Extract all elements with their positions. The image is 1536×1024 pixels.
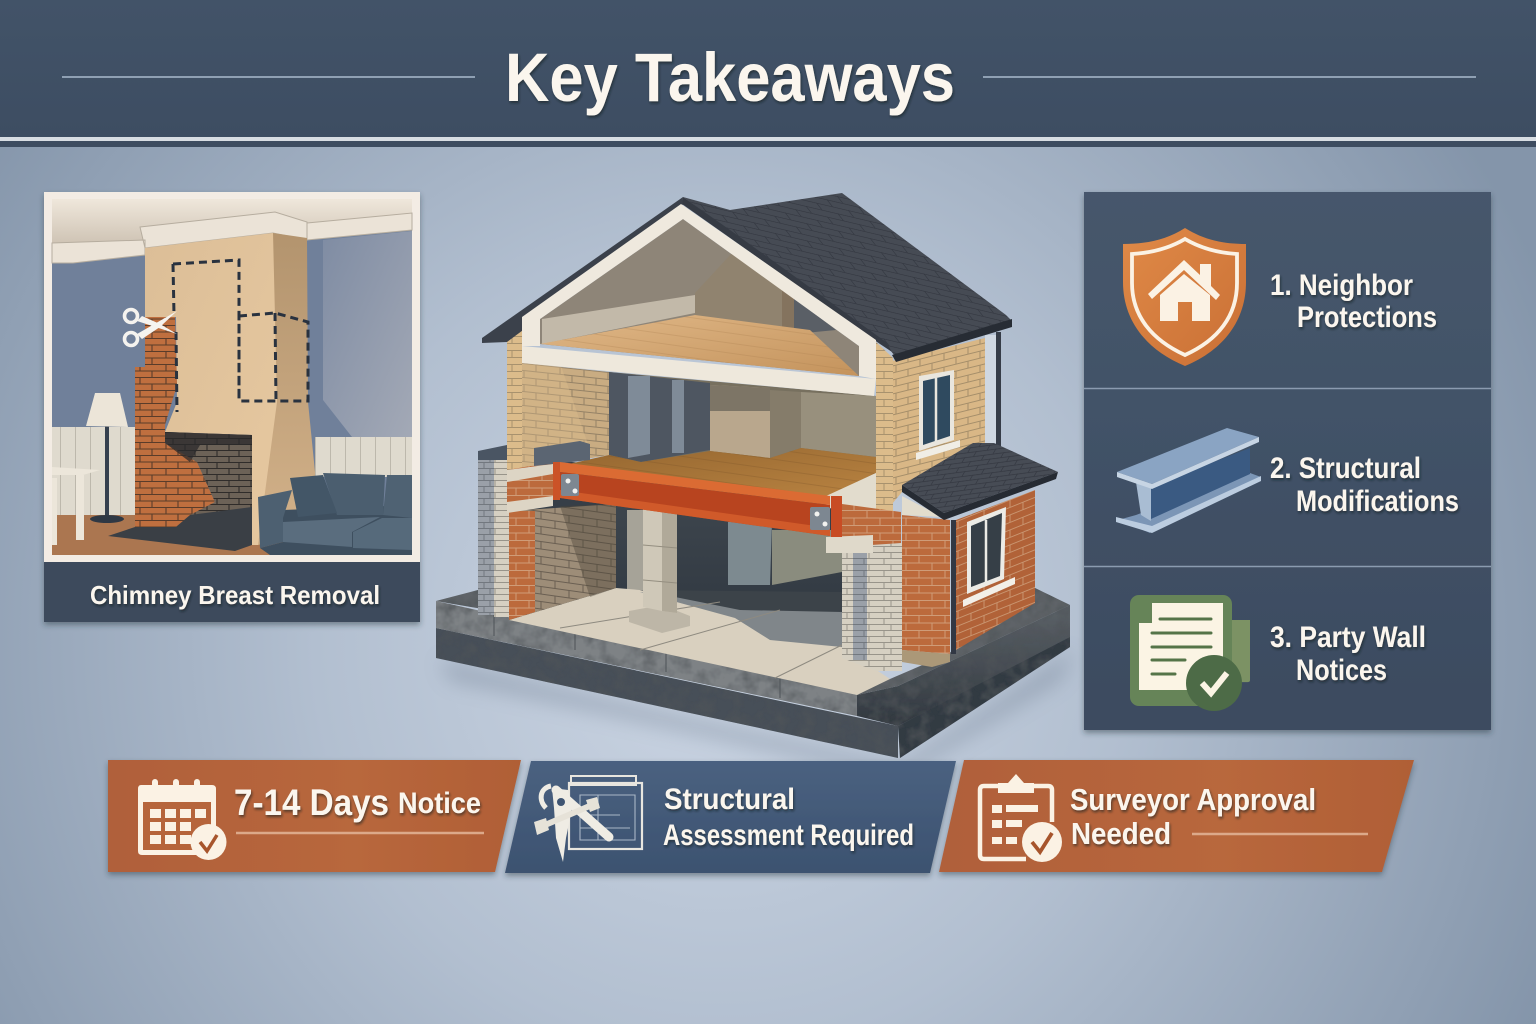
caption bar [44, 562, 420, 622]
text: party wall notices: 3. Party Wall [1270, 621, 1426, 654]
upper floor [560, 448, 876, 498]
right pier [842, 543, 902, 671]
main roof [682, 193, 1012, 362]
sofa [258, 473, 412, 555]
wainscot left [52, 427, 135, 515]
crown moulding [52, 212, 412, 263]
dashed removal outlines [173, 260, 308, 412]
hearth [108, 507, 252, 551]
text: structural modifications: Modifications [1296, 485, 1459, 518]
right upper side wall [892, 338, 985, 504]
downpipe [985, 332, 1001, 448]
caption: Chimney Breast Removal [90, 580, 380, 610]
text: neighbor protections [1270, 269, 1437, 334]
ledge [826, 473, 876, 511]
icon: notice document [1130, 595, 1250, 711]
text: 7-14 days notice: Notice [398, 787, 481, 820]
house illustration [436, 193, 1074, 778]
lower floor [509, 588, 890, 695]
bolted bracket right [810, 507, 830, 530]
side table [52, 467, 100, 545]
text: surveyor approval needed: Surveyor Approval [1070, 782, 1316, 817]
wainscot right [315, 437, 412, 477]
text: surveyor approval needed [1070, 782, 1316, 851]
text: 7-14 days notice: 7-14 Days [234, 782, 389, 823]
upper interior [609, 372, 876, 462]
text: structural assessment required: Assessment Required [663, 819, 914, 852]
left wing wall [478, 445, 509, 617]
panel: chimney breast removal [44, 192, 420, 622]
house backing [509, 455, 842, 650]
bolted bracket left [561, 474, 579, 496]
icon: clipboard [980, 774, 1062, 862]
text: party wall notices: Notices [1296, 654, 1387, 687]
header band [0, 0, 1536, 147]
title: Key Takeaways [505, 39, 955, 116]
brick band right [842, 504, 901, 547]
chimney side face [258, 233, 315, 545]
floor lamp [86, 393, 128, 523]
concrete slab [436, 588, 1070, 758]
attic interior [540, 219, 859, 376]
left brick corner column [507, 323, 522, 470]
text: neighbor protections: Protections [1297, 301, 1437, 334]
steel beam [553, 462, 842, 537]
text: structural modifications [1270, 452, 1459, 518]
extension downpipe [951, 520, 956, 654]
banner: notice period [108, 760, 521, 872]
column [629, 509, 690, 633]
text: 7-14 days notice [234, 782, 481, 823]
icon: calendar [138, 782, 226, 860]
ground shadow [440, 650, 1074, 778]
gable barge board [482, 197, 683, 343]
right corner brick column [876, 342, 893, 511]
text: structural assessment required [663, 783, 914, 852]
gable frame [522, 204, 876, 379]
wood floor [52, 515, 412, 555]
upper left brick wall [522, 363, 609, 470]
text: party wall notices [1270, 621, 1426, 687]
wall shading [323, 231, 412, 437]
brick band left [507, 441, 590, 513]
extension [902, 443, 1058, 667]
panel: numbered takeaways [1084, 192, 1491, 730]
icon: blueprint and compass [534, 776, 642, 862]
banner: structural assessment [505, 761, 956, 873]
firebox [165, 432, 252, 515]
extension window [963, 507, 1015, 607]
text: neighbor protections: 1. Neighbor [1270, 269, 1413, 302]
icon: steel I-beam [1116, 428, 1261, 533]
lower left brick wall [509, 504, 616, 620]
text: structural modifications: 2. Structural [1270, 452, 1421, 485]
banner: surveyor approval [939, 760, 1414, 872]
text: surveyor approval needed: Needed [1071, 816, 1171, 851]
ceiling [52, 199, 412, 243]
upper window [916, 370, 960, 460]
extension roof [902, 443, 1058, 513]
chimney front face [145, 233, 277, 545]
icon: shield [1123, 228, 1246, 366]
exposed brick [135, 317, 215, 528]
icon: scissors [124, 310, 177, 346]
text: structural assessment required: Structural [664, 783, 795, 816]
ceiling beam [522, 346, 876, 396]
lower interior [616, 504, 842, 647]
